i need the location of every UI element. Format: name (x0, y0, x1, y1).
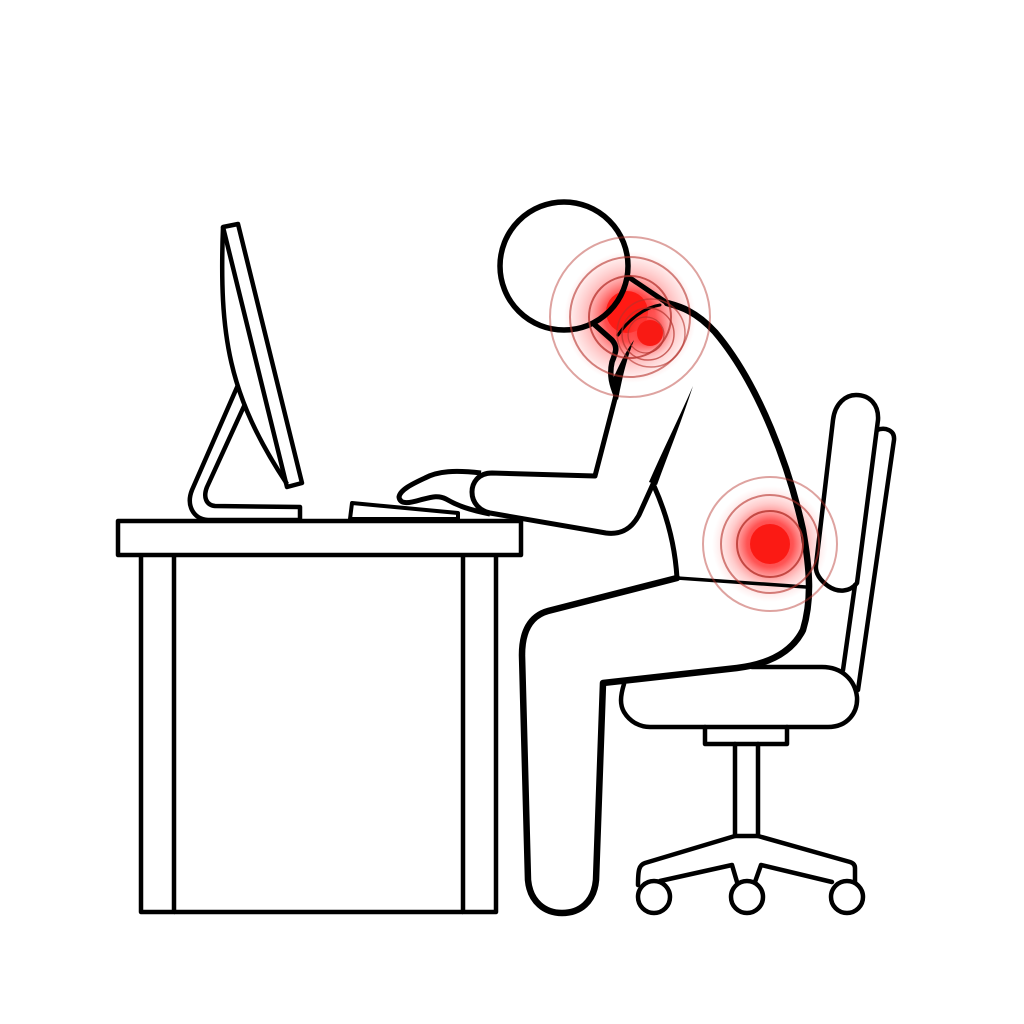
caster middle (731, 881, 763, 913)
keyboard (350, 503, 458, 519)
desk (118, 521, 521, 912)
rear back panel (858, 429, 894, 690)
neck back (630, 278, 667, 303)
thigh, shin and back (522, 303, 809, 913)
front neck (595, 325, 616, 395)
neck sliver (610, 340, 634, 400)
collar curve (618, 305, 660, 335)
desk underside (174, 910, 463, 914)
chair post (735, 744, 758, 836)
upper arm and forearm (472, 395, 653, 533)
caster right (831, 881, 863, 913)
hip line (677, 578, 806, 587)
caster left (638, 881, 670, 913)
desk left leg (141, 555, 174, 912)
desk top (118, 521, 521, 555)
lower back pain rings (703, 477, 837, 611)
arm wedge (649, 386, 693, 485)
head (500, 202, 628, 330)
seat bracket (705, 727, 787, 744)
lower back pain glow (712, 486, 828, 602)
computer monitor (190, 224, 302, 520)
monitor stand (190, 385, 300, 520)
hand (399, 471, 490, 514)
office chair (621, 395, 894, 913)
person figure (472, 202, 809, 913)
monitor screen edge (223, 224, 302, 487)
desk right leg (463, 555, 496, 912)
back cushion (816, 395, 878, 591)
torso front (654, 486, 677, 578)
neck pain glow (564, 251, 696, 383)
seat (621, 667, 857, 727)
back support (843, 585, 855, 670)
five-star base (638, 836, 855, 885)
monitor back shell (222, 227, 287, 484)
neck pain rings (550, 237, 710, 397)
